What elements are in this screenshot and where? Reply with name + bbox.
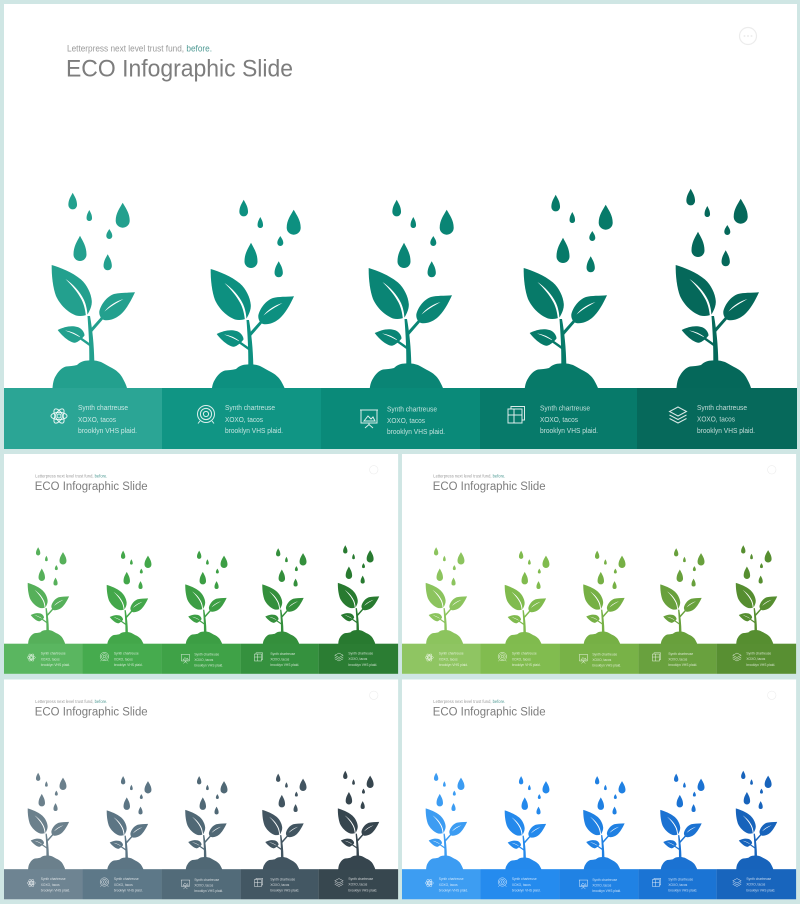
bar segment 3: Synth chartreuse — [194, 652, 219, 656]
bar segment 5 — [637, 388, 797, 449]
bar segment 1: brooklyn VHS plaid. — [41, 663, 70, 667]
bar segment 2: XOXO, tacos — [512, 657, 531, 661]
icon: menu dots — [768, 691, 776, 699]
icon: menu dots — [740, 28, 756, 44]
bar segment 2: brooklyn VHS plaid. — [114, 663, 143, 667]
bar segment 4 — [241, 644, 319, 674]
plant 3 with rain drops — [185, 551, 227, 647]
plant 3 with rain drops — [583, 551, 625, 647]
plant 3 with rain drops — [185, 776, 227, 873]
bar segment 5: Synth chartreuse — [348, 877, 373, 881]
bar segment 1: XOXO, tacos — [439, 657, 458, 661]
bar segment 3: XOXO, tacos — [592, 883, 611, 887]
bar segment 5: brooklyn VHS plaid. — [348, 888, 377, 892]
plant 3 with rain drops — [369, 200, 454, 395]
bar segment 4 — [480, 388, 637, 449]
plant 1 with rain drops — [426, 773, 467, 871]
bar segment 2: brooklyn VHS plaid. — [512, 663, 541, 667]
bar segment 1: brooklyn VHS plaid. — [439, 663, 468, 667]
plant 5 with rain drops — [676, 189, 759, 392]
icon: menu dots — [768, 466, 776, 474]
bar segment 2: XOXO, tacos — [114, 657, 133, 661]
bar segment 2: Synth chartreuse — [114, 877, 139, 881]
plant 5 with rain drops — [338, 545, 379, 646]
bar segment 3: Synth chartreuse — [592, 652, 617, 656]
bar segment 2: Synth chartreuse — [512, 652, 537, 656]
bar segment 4: brooklyn VHS plaid. — [270, 888, 299, 892]
plant 2 with rain drops — [505, 776, 549, 873]
bar segment 2: Synth chartreuse — [114, 652, 139, 656]
bar segment 3 — [162, 869, 241, 899]
plant 4 with rain drops — [262, 774, 307, 873]
icon: menu dots — [370, 466, 378, 474]
bar segment 5 — [319, 869, 398, 899]
plant 1 with rain drops — [52, 193, 135, 392]
subtitle: Letterpress next level trust fund, before. — [35, 473, 107, 478]
bar segment 5: brooklyn VHS plaid. — [348, 663, 377, 667]
bar segment 4: XOXO, tacos — [540, 417, 578, 424]
bar segment 5: XOXO, tacos — [348, 883, 368, 887]
bar segment 4: Synth chartreuse — [270, 877, 295, 881]
bar segment 5 — [717, 644, 796, 674]
bar segment 3: Synth chartreuse — [592, 878, 617, 882]
bar segment 1: Synth chartreuse — [78, 405, 128, 412]
bar segment 3: brooklyn VHS plaid. — [387, 429, 445, 436]
bar segment 3: brooklyn VHS plaid. — [194, 663, 223, 667]
bar segment 4: brooklyn VHS plaid. — [668, 663, 697, 667]
bar segment 2: Synth chartreuse — [512, 877, 537, 881]
plant 2 with rain drops — [107, 551, 151, 648]
bar segment 3 — [560, 869, 639, 899]
bar segment 2: XOXO, tacos — [225, 417, 263, 424]
bar segment 3: XOXO, tacos — [194, 883, 213, 887]
title: ECO Infographic Slide — [66, 56, 293, 83]
bar segment 3: brooklyn VHS plaid. — [194, 889, 223, 893]
bar segment 3 — [321, 388, 480, 449]
bar segment 3: brooklyn VHS plaid. — [592, 889, 621, 893]
plant 2 with rain drops — [211, 200, 301, 396]
title: ECO Infographic Slide — [35, 479, 148, 493]
panel: blue slide — [402, 679, 796, 899]
plant 5 with rain drops — [736, 771, 777, 871]
bar segment 2 — [481, 644, 560, 674]
bar segment 4: Synth chartreuse — [668, 877, 693, 881]
bar segment 4: Synth chartreuse — [668, 652, 693, 656]
plant 5 with rain drops — [338, 771, 379, 871]
bar segment 5: brooklyn VHS plaid. — [697, 428, 755, 435]
plant 4 with rain drops — [660, 548, 705, 647]
bar segment 2: XOXO, tacos — [114, 883, 133, 887]
bar segment 2: brooklyn VHS plaid. — [114, 888, 143, 892]
bar segment 3: XOXO, tacos — [592, 658, 611, 662]
subtitle: Letterpress next level trust fund, before. — [67, 44, 212, 54]
bar segment 1: Synth chartreuse — [41, 877, 66, 881]
bar segment 3: XOXO, tacos — [194, 658, 213, 662]
bar segment 3: Synth chartreuse — [194, 878, 219, 882]
bar segment 4: brooklyn VHS plaid. — [668, 888, 697, 892]
bar segment 1: Synth chartreuse — [439, 652, 464, 656]
plant 4 with rain drops — [660, 774, 705, 873]
bar segment 5: Synth chartreuse — [348, 652, 373, 656]
bar segment 4 — [241, 869, 319, 899]
bar segment 1: XOXO, tacos — [439, 883, 458, 887]
bar segment 5: Synth chartreuse — [697, 405, 747, 412]
plant 4 with rain drops — [524, 195, 613, 395]
bar segment 3 — [560, 644, 639, 674]
bar segment 2 — [162, 388, 321, 449]
bar segment 5: brooklyn VHS plaid. — [746, 888, 775, 892]
bar segment 4: brooklyn VHS plaid. — [270, 663, 299, 667]
plant 1 with rain drops — [28, 547, 69, 646]
bar segment 1: XOXO, tacos — [78, 417, 116, 424]
plant 4 with rain drops — [262, 548, 307, 647]
plant 2 with rain drops — [505, 551, 549, 648]
panel: large teal slide — [4, 4, 797, 449]
title: ECO Infographic Slide — [433, 704, 546, 718]
icon: menu dots — [370, 691, 378, 699]
bar segment 5 — [319, 644, 398, 674]
bar segment 2 — [83, 644, 162, 674]
bar segment 4: brooklyn VHS plaid. — [540, 428, 598, 435]
bar segment 1: Synth chartreuse — [41, 652, 66, 656]
bar segment 2 — [481, 869, 560, 899]
bar segment 3: brooklyn VHS plaid. — [592, 663, 621, 667]
bar segment 1 — [4, 644, 83, 674]
bar segment 5: XOXO, tacos — [697, 416, 735, 424]
bar segment 4 — [639, 869, 717, 899]
bar segment 5: XOXO, tacos — [746, 883, 766, 887]
subtitle: Letterpress next level trust fund, before. — [433, 473, 505, 478]
bar segment 5: XOXO, tacos — [746, 657, 766, 661]
bar segment 1 — [402, 644, 481, 674]
bar segment 3 — [162, 644, 241, 674]
bar segment 1: XOXO, tacos — [41, 883, 60, 887]
bar segment 2 — [83, 869, 162, 899]
bar segment 1 — [4, 869, 83, 899]
bar segment 2: brooklyn VHS plaid. — [512, 888, 541, 892]
bar segment 5: Synth chartreuse — [746, 877, 771, 881]
bar segment 4: XOXO, tacos — [270, 657, 290, 661]
bar segment 3: Synth chartreuse — [387, 406, 437, 414]
panel: green slide — [4, 454, 398, 674]
bar segment 4: Synth chartreuse — [270, 652, 295, 656]
bar segment 1: XOXO, tacos — [41, 657, 60, 661]
bar segment 1: brooklyn VHS plaid. — [439, 888, 468, 892]
bar segment 4 — [639, 644, 717, 674]
bar segment 4: Synth chartreuse — [540, 406, 590, 412]
bar segment 3: XOXO, tacos — [387, 418, 425, 425]
bar segment 4: XOXO, tacos — [270, 883, 290, 887]
bar segment 4: XOXO, tacos — [668, 883, 688, 887]
plant 5 with rain drops — [736, 545, 777, 646]
subtitle: Letterpress next level trust fund, before. — [433, 699, 505, 704]
bar segment 2: XOXO, tacos — [512, 883, 531, 887]
plant 2 with rain drops — [107, 776, 151, 873]
plant 1 with rain drops — [426, 547, 467, 646]
bar segment 1: brooklyn VHS plaid. — [41, 888, 70, 892]
bar segment 1: brooklyn VHS plaid. — [78, 428, 137, 435]
bar segment 1 — [402, 869, 481, 899]
bar segment 5: Synth chartreuse — [746, 652, 771, 656]
bar segment 5 — [717, 869, 796, 899]
title: ECO Infographic Slide — [35, 704, 148, 718]
panel: lime slide — [402, 454, 796, 674]
subtitle: Letterpress next level trust fund, before. — [35, 699, 107, 704]
title: ECO Infographic Slide — [433, 479, 546, 493]
panel: slate slide — [4, 679, 398, 899]
bar segment 5: brooklyn VHS plaid. — [746, 663, 775, 667]
bar segment 1 — [4, 388, 162, 449]
bar segment 2: Synth chartreuse — [225, 405, 275, 412]
bar segment 2: brooklyn VHS plaid. — [225, 428, 283, 435]
bar segment 4: XOXO, tacos — [668, 657, 688, 661]
bar segment 1: Synth chartreuse — [439, 877, 464, 881]
plant 1 with rain drops — [28, 773, 69, 871]
plant 3 with rain drops — [583, 776, 625, 873]
bar segment 5: XOXO, tacos — [348, 657, 368, 661]
